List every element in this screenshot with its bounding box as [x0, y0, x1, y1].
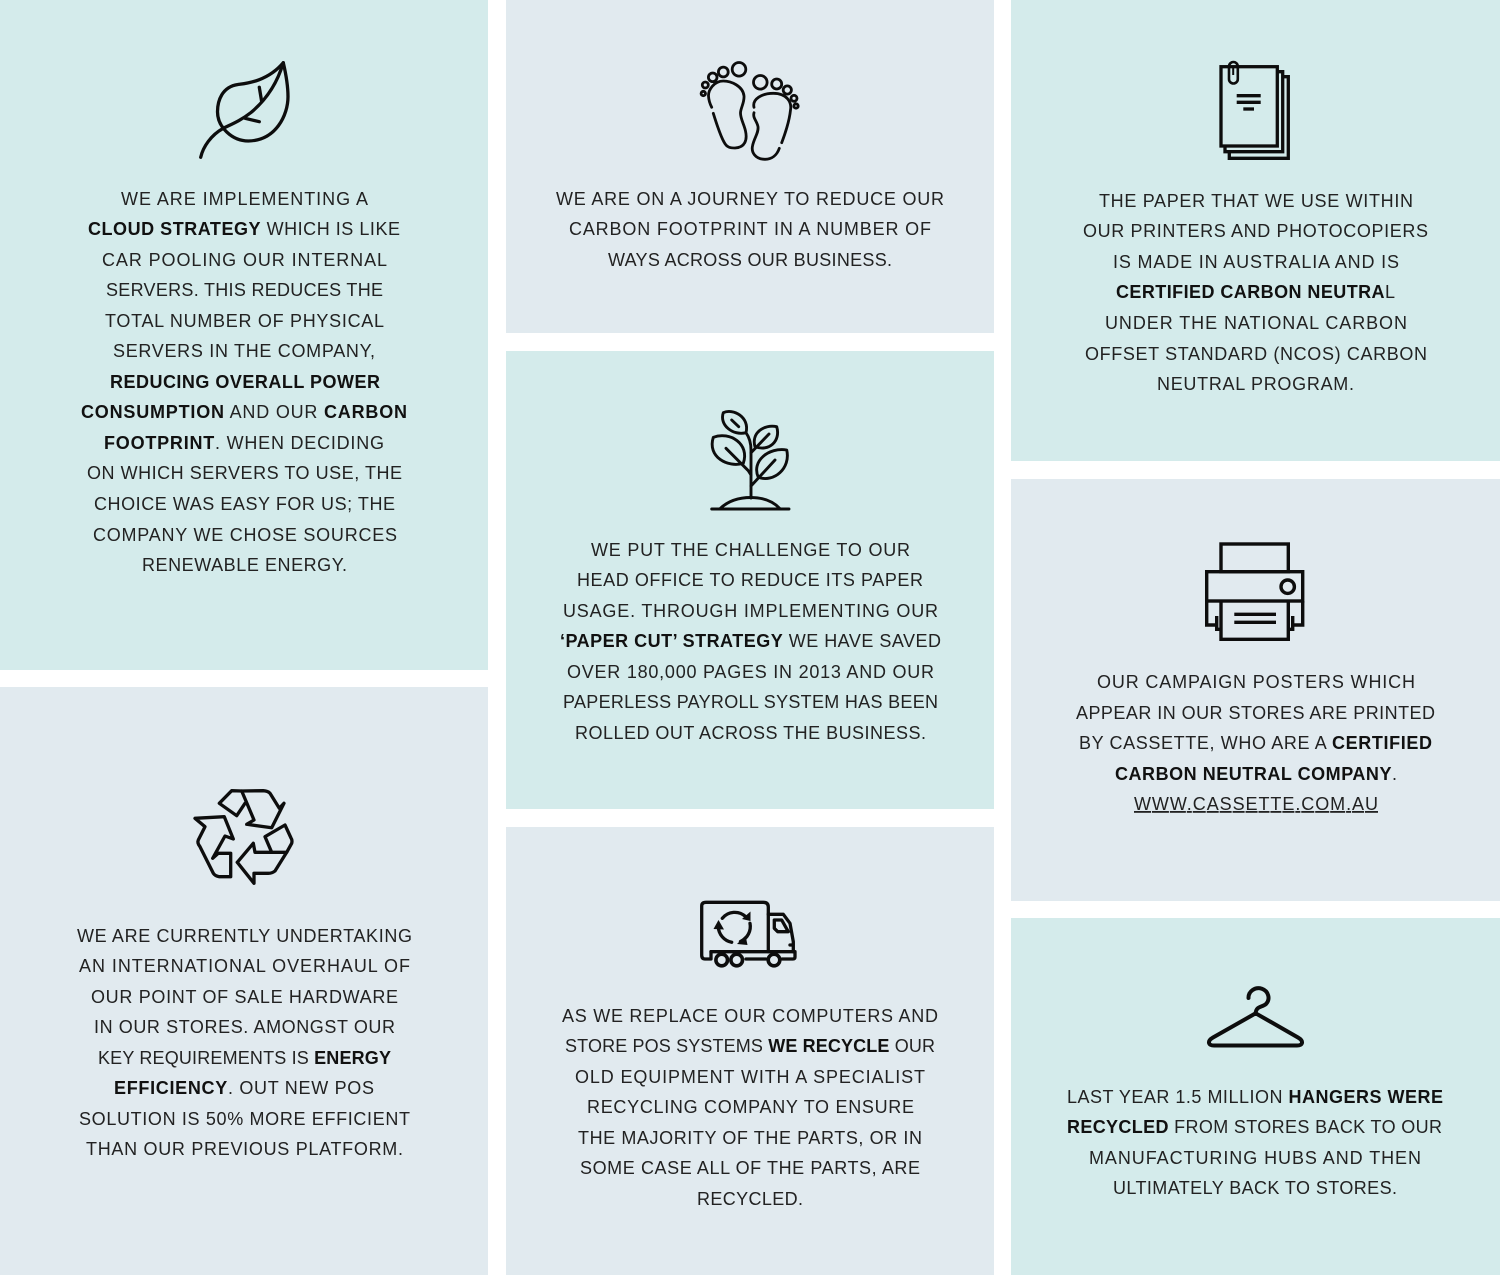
panel: certified paper — [1011, 0, 1500, 461]
text: hanger recycling — [1067, 1087, 1443, 1198]
text: paper cut strategy: OVER 180,000 PAGES IN 2013 AND OUR — [567, 662, 934, 682]
text: cloud strategy — [81, 189, 407, 575]
text: point of sale hardware: SOLUTION IS 50% MORE EFFICIENT — [79, 1109, 410, 1129]
text: hanger recycling: RECYCLED FROM STORES BACK TO OUR — [1067, 1117, 1442, 1137]
text: equipment recycling: RECYCLING COMPANY TO ENSURE — [587, 1097, 914, 1117]
icon: coat hanger — [1209, 988, 1302, 1046]
text: paper cut strategy — [560, 540, 941, 743]
text: point of sale hardware: IN OUR STORES. AMONGST OUR — [94, 1017, 395, 1037]
icon: recycle — [195, 791, 292, 883]
text: point of sale hardware: OUR POINT OF SALE HARDWARE — [91, 987, 398, 1007]
text: equipment recycling: OLD EQUIPMENT WITH A SPECIALIST — [575, 1067, 925, 1087]
text: cloud strategy: ON WHICH SERVERS TO USE, THE — [87, 463, 402, 483]
text: campaign posters: BY CASSETTE, WHO ARE A CERTIFIED — [1079, 733, 1432, 753]
text: paper cut strategy: PAPERLESS PAYROLL SYSTEM HAS BEEN — [563, 692, 938, 712]
text: point of sale hardware: WE ARE CURRENTLY UNDERTAKING — [77, 926, 412, 946]
text: cloud strategy: REDUCING OVERALL POWER — [110, 372, 380, 392]
panel: paper cut strategy — [506, 351, 994, 809]
text: certified paper: IS MADE IN AUSTRALIA AND IS — [1113, 252, 1399, 272]
text: cloud strategy: TOTAL NUMBER OF PHYSICAL — [105, 311, 384, 331]
text: campaign posters: CARBON NEUTRAL COMPANY. — [1115, 764, 1397, 784]
text: equipment recycling: AS WE REPLACE OUR COMPUTERS AND — [562, 1006, 938, 1026]
text: carbon footprint journey — [556, 189, 944, 270]
panel: campaign posters — [1011, 479, 1500, 901]
text: cloud strategy: SERVERS. THIS REDUCES THE — [106, 280, 383, 300]
text: point of sale hardware: THAN OUR PREVIOUS PLATFORM. — [86, 1139, 403, 1159]
text: point of sale hardware — [77, 926, 412, 1159]
text: certified paper — [1083, 191, 1428, 394]
panel: equipment recycling — [506, 827, 994, 1275]
panel: cloud strategy — [0, 0, 488, 670]
text: certified paper: THE PAPER THAT WE USE WITHIN — [1099, 191, 1413, 211]
text: point of sale hardware: AN INTERNATIONAL OVERHAUL OF — [79, 956, 410, 976]
text: certified paper: NEUTRAL PROGRAM. — [1157, 374, 1354, 394]
text: cloud strategy: FOOTPRINT. WHEN DECIDING — [104, 433, 384, 453]
text: paper cut strategy: WE PUT THE CHALLENGE TO OUR — [591, 540, 910, 560]
text: certified paper: UNDER THE NATIONAL CARBON — [1105, 313, 1407, 333]
text: paper cut strategy: USAGE. THROUGH IMPLEMENTING OUR — [563, 601, 938, 621]
text: cloud strategy: RENEWABLE ENERGY. — [142, 555, 347, 575]
text: carbon footprint journey: WE ARE ON A JOURNEY TO REDUCE OUR — [556, 189, 944, 209]
text: cloud strategy: COMPANY WE CHOSE SOURCES — [93, 525, 397, 545]
text: hanger recycling: MANUFACTURING HUBS AND THEN — [1089, 1148, 1421, 1168]
text: point of sale hardware: KEY REQUIREMENTS IS ENERGY — [98, 1048, 391, 1068]
icon: footprints — [701, 63, 798, 159]
text: campaign posters — [1076, 672, 1435, 814]
text: certified paper: CERTIFIED CARBON NEUTRAL — [1116, 282, 1395, 302]
panel: point of sale hardware — [0, 687, 488, 1275]
text: paper cut strategy: ‘PAPER CUT’ STRATEGY WE HAVE SAVED — [560, 631, 941, 651]
icon: printer — [1207, 544, 1303, 639]
text: paper cut strategy: HEAD OFFICE TO REDUCE ITS PAPER — [577, 570, 923, 590]
text: cloud strategy: SERVERS IN THE COMPANY, — [113, 341, 375, 361]
text: certified paper: OUR PRINTERS AND PHOTOCOPIERS — [1083, 221, 1428, 241]
text: cloud strategy: CLOUD STRATEGY WHICH IS LIKE — [88, 219, 400, 239]
icon: recycling truck — [702, 902, 795, 966]
text: campaign posters: OUR CAMPAIGN POSTERS WHICH — [1097, 672, 1415, 692]
text: carbon footprint journey: WAYS ACROSS OUR BUSINESS. — [608, 250, 892, 270]
text: point of sale hardware: EFFICIENCY. OUT NEW POS — [114, 1078, 374, 1098]
icon: paper stack — [1221, 62, 1288, 158]
text: equipment recycling — [562, 1006, 938, 1209]
text: campaign posters: APPEAR IN OUR STORES ARE PRINTED — [1076, 703, 1435, 723]
panel: hanger recycling — [1011, 918, 1500, 1275]
text: paper cut strategy: ROLLED OUT ACROSS THE BUSINESS. — [575, 723, 926, 743]
text: certified paper: OFFSET STANDARD (NCOS) CARBON — [1085, 344, 1427, 364]
panel: carbon footprint journey — [506, 0, 994, 333]
text: cloud strategy: CHOICE WAS EASY FOR US; THE — [94, 494, 395, 514]
text: hanger recycling: ULTIMATELY BACK TO STORES. — [1113, 1178, 1397, 1198]
text: campaign posters: WWW.CASSETTE.COM.AU — [1134, 794, 1378, 814]
icon: plant — [712, 411, 789, 509]
text: carbon footprint journey: CARBON FOOTPRINT IN A NUMBER OF — [569, 219, 931, 239]
text: equipment recycling: STORE POS SYSTEMS WE RECYCLE OUR — [565, 1036, 935, 1056]
text: equipment recycling: THE MAJORITY OF THE PARTS, OR IN — [578, 1128, 922, 1148]
text: cloud strategy: CAR POOLING OUR INTERNAL — [102, 250, 387, 270]
icon: leaf — [201, 63, 288, 157]
text: cloud strategy: CONSUMPTION AND OUR CARBON — [81, 402, 407, 422]
text: hanger recycling: LAST YEAR 1.5 MILLION HANGERS WERE — [1067, 1087, 1443, 1107]
text: equipment recycling: SOME CASE ALL OF THE PARTS, ARE — [580, 1158, 920, 1178]
text: equipment recycling: RECYCLED. — [697, 1189, 803, 1209]
text: cloud strategy: WE ARE IMPLEMENTING A — [121, 189, 368, 209]
